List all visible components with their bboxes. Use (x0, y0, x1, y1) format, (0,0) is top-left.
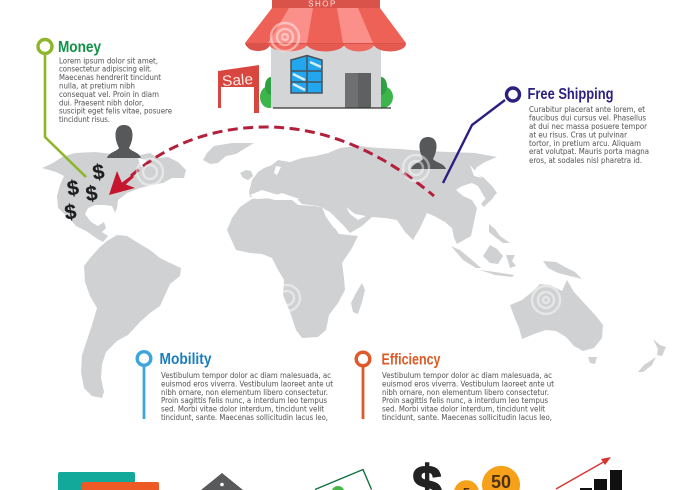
text: money: consequat vel. Proin in diam (59, 90, 159, 99)
text: mobility (161, 371, 333, 422)
text: money: consectetur adipiscing elit. (59, 65, 152, 74)
heading: efficiency: Efficiency (382, 352, 441, 368)
icons: dollar signs: $ (91, 160, 106, 185)
text: money: tincidunt risus. (59, 115, 110, 124)
text: mobility: Proin sagittis felis nunc, a interdum leo tempus (161, 396, 327, 405)
new guinea (543, 261, 582, 279)
text: mobility: sed. Morbi vitae dolor interdum, tincidunt velit (161, 405, 324, 414)
text: money: dui. Praesent nibh dolor, (59, 98, 144, 107)
text: efficiency: Proin sagittis felis nunc, a interdum leo tempus (382, 396, 548, 405)
text: efficiency: Vestibulum tempor dolor ac diam malesuada, ac (382, 371, 552, 380)
text: money: Lorem ipsum dolor sit amet, (59, 56, 158, 65)
dashed route arc (131, 127, 434, 196)
north america (42, 151, 186, 242)
text: mobility: Vestibulum tempor dolor ac diam malesuada, ac (161, 371, 331, 380)
text: free shipping: eros, at sodales nisl pharetra id. (529, 156, 642, 165)
text: efficiency (382, 371, 554, 422)
icons: dollar signs: $ (84, 182, 99, 206)
australia (510, 280, 603, 351)
text: free shipping: tortor, in pretium arcu. Aliquam (529, 139, 641, 148)
awning (245, 8, 406, 52)
text: free shipping: erat volutpat. Mauris porta magna (529, 147, 649, 156)
text: mobility: tincidunt, sante. Maecenas sollicitudin lacus leo, (161, 413, 328, 422)
pin: free shipping (443, 88, 520, 183)
heading: free shipping: Free Shipping (528, 86, 614, 103)
icon: banknote (315, 470, 372, 490)
text: free shipping: faucibus dui cursus vel. Phasellus (529, 114, 646, 123)
text: free shipping: at eu risus. Cras ut pulvinar (529, 130, 628, 139)
text: mobility: nibh ornare, non elementum libero consectetur. (161, 388, 328, 397)
greenland (203, 143, 254, 164)
borneo (483, 245, 503, 264)
icons: dollar signs: $ (66, 176, 81, 201)
eurasia (249, 146, 497, 244)
icon: person left (107, 125, 141, 158)
heading: money: Money (58, 39, 101, 56)
arrow head (109, 171, 135, 195)
text: efficiency: euismod eros viverra. Vestibulum laoreet ante ut (382, 380, 554, 388)
icons: dollar signs (63, 160, 106, 225)
icon: credit cards (58, 472, 159, 490)
sulawesi and philippines (489, 224, 516, 268)
java (480, 270, 514, 277)
madagascar (351, 283, 365, 314)
watermarks (137, 155, 560, 314)
shop sign (272, 0, 380, 8)
text: money: nulla, at pretium nibh (59, 82, 135, 90)
shop illustration (245, 0, 406, 108)
sumatra (451, 246, 481, 268)
text: efficiency: sed. Morbi vitae dolor interdum, tincidunt velit (382, 405, 545, 414)
south america (81, 235, 181, 398)
pin: money (38, 40, 86, 177)
building (271, 46, 381, 108)
door (345, 73, 371, 108)
ground line (273, 107, 391, 109)
iceland and uk (240, 170, 253, 180)
sale sign: Sale (221, 71, 254, 90)
text: free shipping: Curabitur placerat ante lorem, et (529, 105, 645, 114)
mediterranean and inland water (138, 158, 482, 230)
icon: coins (454, 466, 520, 490)
text: mobility: euismod eros viverra. Vestibulum laoreet ante ut (161, 380, 333, 388)
window (291, 56, 322, 93)
africa (227, 197, 358, 338)
sale sign (218, 65, 259, 113)
icon: growth chart (556, 457, 622, 490)
new zealand (638, 339, 666, 372)
watermark spiral on awning (271, 23, 299, 51)
bushes (260, 77, 393, 108)
icons: dollar signs: $ (63, 200, 78, 225)
pin: efficiency (356, 352, 370, 419)
text: efficiency: tincidunt, sante. Maecenas sollicitudin lacus leo, (382, 413, 552, 422)
text: free shipping (529, 105, 649, 165)
text: money: Maecenas hendrerit tincidunt (59, 73, 161, 82)
heading: mobility: Mobility (160, 351, 212, 368)
icon: person right (411, 137, 446, 169)
icon: price tag (201, 473, 243, 490)
text: free shipping: at dui nec massa posuere tempor (529, 122, 648, 131)
text: money: suscipit eget felis vitae, posuere (59, 107, 172, 116)
text: money (59, 56, 172, 124)
pin: mobility (137, 352, 151, 419)
world map (42, 143, 666, 398)
tasmania (588, 357, 597, 364)
text: efficiency: nibh ornare, non elementum libero consectetur. (382, 388, 549, 397)
japan (481, 186, 494, 207)
